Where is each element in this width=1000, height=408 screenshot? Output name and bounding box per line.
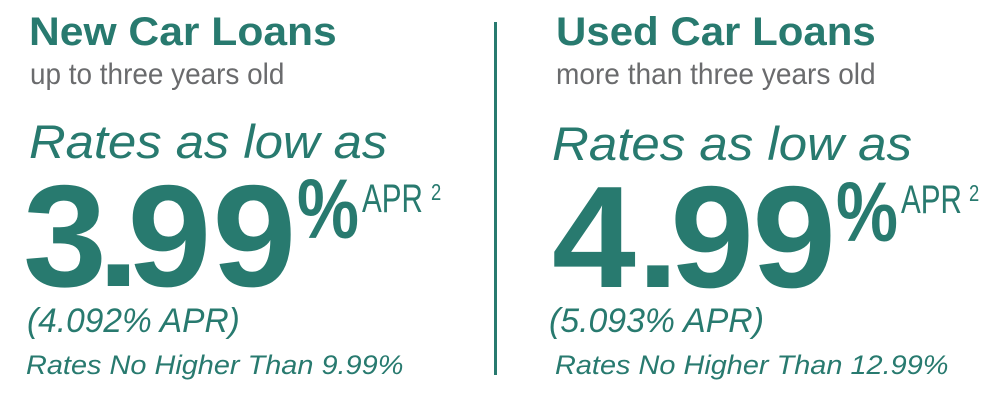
- text: rates as low as: Rates as low as: [552, 117, 912, 170]
- heading: new car loans: New Car Loans: [29, 10, 337, 54]
- rate: 4.99: 4.99: [552, 156, 836, 318]
- footnote marker: 2: 2: [969, 180, 979, 206]
- percent sign: %: [836, 165, 898, 259]
- panel: new car loans: [23, 10, 441, 380]
- text: comparison APR: (4.092% APR): [27, 302, 240, 340]
- subheading: up to three years old: up to three years old: [30, 58, 284, 91]
- divider: [494, 22, 497, 375]
- text: rate cap: Rates No Higher Than 9.99%: [26, 350, 403, 380]
- heading: used car loans: Used Car Loans: [556, 10, 876, 54]
- text: comparison APR: (5.093% APR): [549, 302, 764, 340]
- text: rates as low as: Rates as low as: [29, 115, 387, 168]
- percent sign: %: [297, 162, 359, 256]
- label: APR: APR: [901, 178, 962, 222]
- subheading: more than three years old: more than three years old: [556, 58, 876, 91]
- text: rate cap: Rates No Higher Than 12.99%: [555, 350, 948, 380]
- footnote marker: 2: 2: [431, 179, 441, 205]
- label: APR: APR: [362, 177, 423, 221]
- rate: 3.99: 3.99: [23, 155, 296, 317]
- panel: used car loans: [549, 10, 979, 380]
